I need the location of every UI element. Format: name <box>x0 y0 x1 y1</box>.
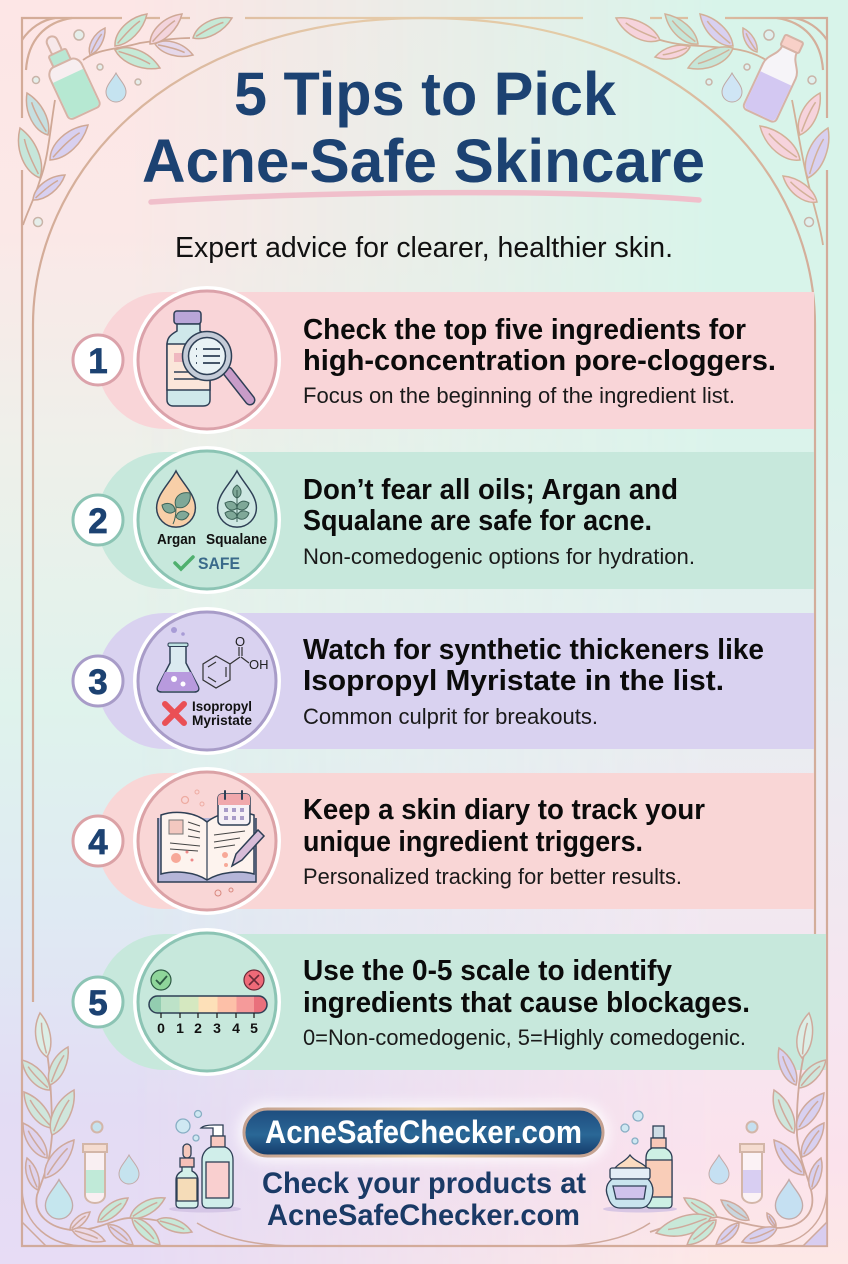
panel: tip 1 <box>73 288 814 432</box>
icon circle: argan and squalane drops: SAFE <box>198 554 240 573</box>
number badge 4: 4 <box>88 823 108 862</box>
icon circle: flask, molecule and cross: O <box>235 634 245 649</box>
icon: cream jar and spray bottle <box>603 1111 677 1212</box>
icon circle: skin diary <box>135 769 279 913</box>
icon circle: flask, molecule and cross <box>135 609 279 753</box>
title <box>142 60 705 195</box>
tip 1 text <box>303 314 776 408</box>
icon circle: flask, molecule and cross: Isopropyl <box>192 698 252 714</box>
number badge 3: 3 <box>88 663 108 702</box>
panel: tip 5 <box>73 930 826 1074</box>
tip 3 text: Isopropyl Myristate in the list. <box>303 665 724 697</box>
icon: dropper and pump bottle <box>169 1110 241 1212</box>
icon circle: comedogenic scale: 5 <box>250 1020 258 1036</box>
bottom left floral corner <box>17 1012 300 1249</box>
icon circle: flask, molecule and cross: OH <box>249 657 268 672</box>
top right floral corner <box>612 9 836 245</box>
icon circle: comedogenic scale: 3 <box>213 1020 221 1036</box>
band <box>97 613 814 749</box>
icon circle: comedogenic scale <box>135 930 279 1074</box>
number badge 5 <box>73 977 123 1027</box>
tip 3 text: Common culprit for breakouts. <box>303 704 598 729</box>
number badge 1: 1 <box>88 342 108 381</box>
tip 5 text <box>303 955 750 1050</box>
icon: lavender bottle <box>742 31 811 123</box>
tip 1 text: Focus on the beginning of the ingredient list. <box>303 383 735 408</box>
icon: water drops and vial <box>45 1122 139 1219</box>
icon circle: comedogenic scale: 1 <box>176 1020 184 1036</box>
panel: tip 4 <box>73 769 814 913</box>
call-to-action text: Check your products at <box>262 1167 586 1200</box>
band <box>97 934 826 1070</box>
icon circle: comedogenic scale: 2 <box>194 1020 202 1036</box>
icon: water drops and vial <box>709 1122 803 1219</box>
panel: tip 3 <box>73 609 814 753</box>
icon circle: argan and squalane drops <box>135 448 279 592</box>
call-to-action pill: AcneSafeChecker.com <box>265 1114 582 1150</box>
title: Acne-Safe Skincare <box>142 127 705 195</box>
band <box>97 452 814 589</box>
number badge 4 <box>73 816 123 866</box>
number badge 3 <box>73 656 123 706</box>
tip 4 text: unique ingredient triggers. <box>303 826 643 858</box>
number badge 1 <box>73 335 123 385</box>
tip 3 text <box>303 634 764 729</box>
band <box>97 773 814 909</box>
icon: water drop <box>106 73 126 102</box>
icon: green dropper bottle <box>34 30 101 120</box>
title: 5 Tips to Pick <box>234 60 616 128</box>
tip 4 text: Personalized tracking for better results. <box>303 864 682 889</box>
top left floral corner <box>11 8 235 227</box>
icon circle: comedogenic scale: 4 <box>232 1020 240 1036</box>
number badge 5: 5 <box>88 984 108 1023</box>
tip 5 text: Use the 0-5 scale to identify <box>303 955 672 987</box>
icon circle: argan and squalane drops: Squalane <box>206 532 267 548</box>
tip 4 text: Keep a skin diary to track your <box>303 794 705 826</box>
call-to-action text <box>262 1167 586 1232</box>
panel: tip 2 <box>73 448 814 592</box>
title underline <box>151 193 699 202</box>
tip 4 text <box>303 794 705 889</box>
icon circle: argan and squalane drops: Argan <box>157 532 196 548</box>
tip 2 text: Squalane are safe for acne. <box>303 505 652 537</box>
number badge 2: 2 <box>88 502 108 541</box>
subtitle: Expert advice for clearer, healthier skin. <box>175 232 673 264</box>
tip 2 text <box>303 474 695 569</box>
tip 2 text: Don’t fear all oils; Argan and <box>303 474 678 506</box>
icon circle: bottle and magnifier <box>135 288 279 432</box>
tip 3 text: Watch for synthetic thickeners like <box>303 634 764 666</box>
call-to-action pill <box>238 1103 609 1162</box>
tip 5 text: ingredients that cause blockages. <box>303 987 750 1019</box>
icon: water drop <box>722 73 742 102</box>
band <box>97 292 814 429</box>
tip 5 text: 0=Non-comedogenic, 5=Highly comedogenic. <box>303 1025 746 1050</box>
icon circle: comedogenic scale: 0 <box>157 1020 165 1036</box>
tip 2 text: Non-comedogenic options for hydration. <box>303 544 695 569</box>
icon circle: flask, molecule and cross: Myristate <box>192 712 252 728</box>
tip 1 text: high-concentration pore-cloggers. <box>303 345 776 377</box>
call-to-action text: AcneSafeChecker.com <box>267 1199 580 1232</box>
number badge 2 <box>73 495 123 545</box>
bottom right floral corner <box>550 1012 830 1250</box>
tip 1 text: Check the top five ingredients for <box>303 314 746 346</box>
